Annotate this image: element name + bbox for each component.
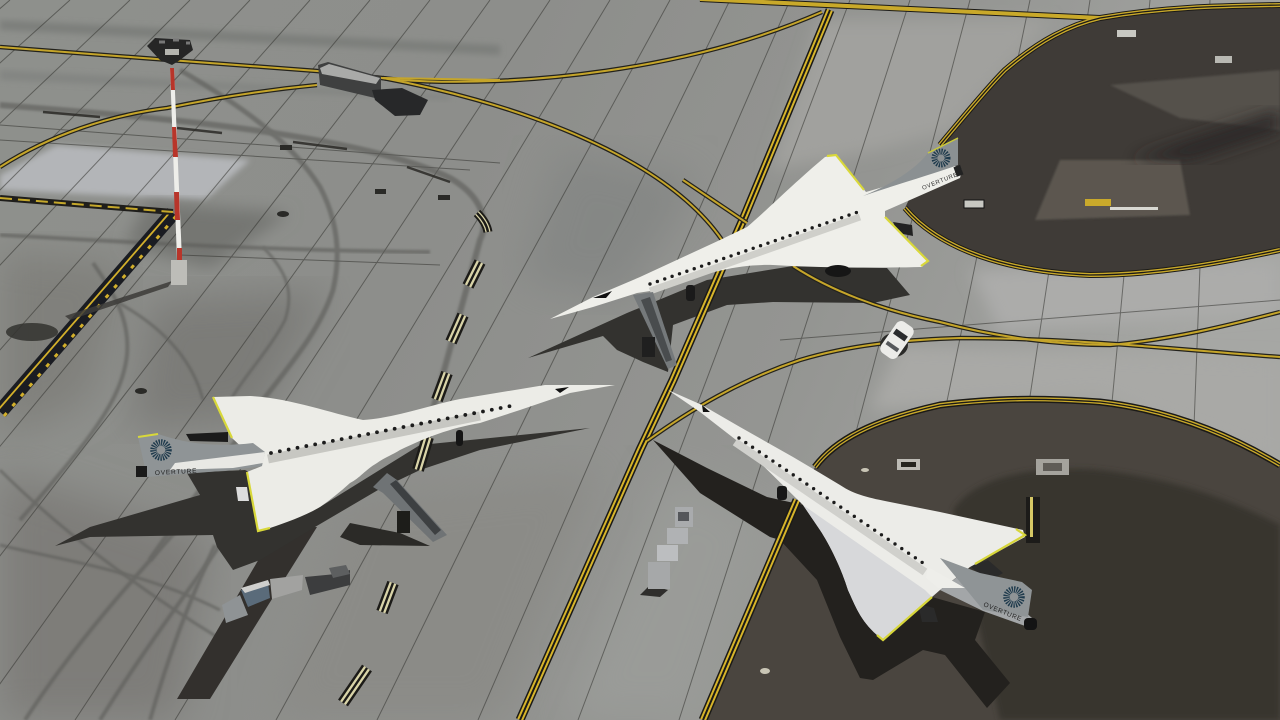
engine nozzle [136,466,147,477]
fin edge [138,434,158,437]
dark strip on tarmac [177,527,317,699]
apron lower patches [760,459,1280,720]
windows [650,212,858,284]
mast head shadow [6,323,58,341]
fuselage name: OVERTURE [982,601,1023,623]
airframe [668,390,1025,640]
airliner: right [668,390,1037,640]
fuselage name: OVERTURE [155,468,197,477]
airliner: left [136,385,615,532]
manhole covers [135,145,450,394]
fuselage shading [735,442,925,572]
engine nozzle [953,165,963,177]
shadow: upper airliner [528,266,910,372]
fuselage shading [268,416,480,459]
cockpit window [702,405,710,412]
baggage train [222,565,350,623]
shadow: left airliner [55,428,590,570]
apron: upper right [905,5,1280,275]
hold marking: beside left airliner [418,437,428,470]
tail logo [934,152,948,164]
tail fin [138,434,265,477]
engines [893,222,913,236]
tail boom [170,452,265,470]
tail fin [863,138,958,196]
airframe [550,155,962,319]
yellow wing edges [213,397,270,531]
tail fin [940,558,1032,617]
fuselage name: OVERTURE [922,172,959,192]
engines [970,560,1003,582]
landing gear [825,265,851,277]
tail logo [1006,590,1022,604]
landing gear [456,430,463,446]
airliner: upper [550,138,963,319]
tail body [940,575,1032,627]
ground vehicles: upper [318,62,428,116]
hold markings: open tarmac [343,213,488,703]
boarding stairs: upper [633,292,677,369]
apron patches [964,30,1280,220]
apron: lower right [703,399,1280,720]
white service car [878,319,916,361]
tire marks [0,70,484,720]
cockpit window [555,387,569,393]
windows [739,438,923,563]
fuselage shading [650,217,860,291]
baggage carts: centre [640,507,693,597]
light mast [65,38,193,320]
yellow wing edges [827,155,928,266]
lower wing shading [803,505,932,640]
yellow wing edges [877,529,1025,640]
windows [271,405,516,453]
tail logo [154,442,168,458]
cockpit window [593,291,612,298]
nose gear [686,285,695,301]
landing gear [777,486,787,500]
airframe [213,385,615,532]
boarding stairs: left [340,473,447,546]
engine nozzle [1024,618,1037,630]
tail boom [926,567,965,588]
shadow: right airliner [653,440,1010,708]
fin edge [928,138,958,153]
engines [186,432,228,442]
